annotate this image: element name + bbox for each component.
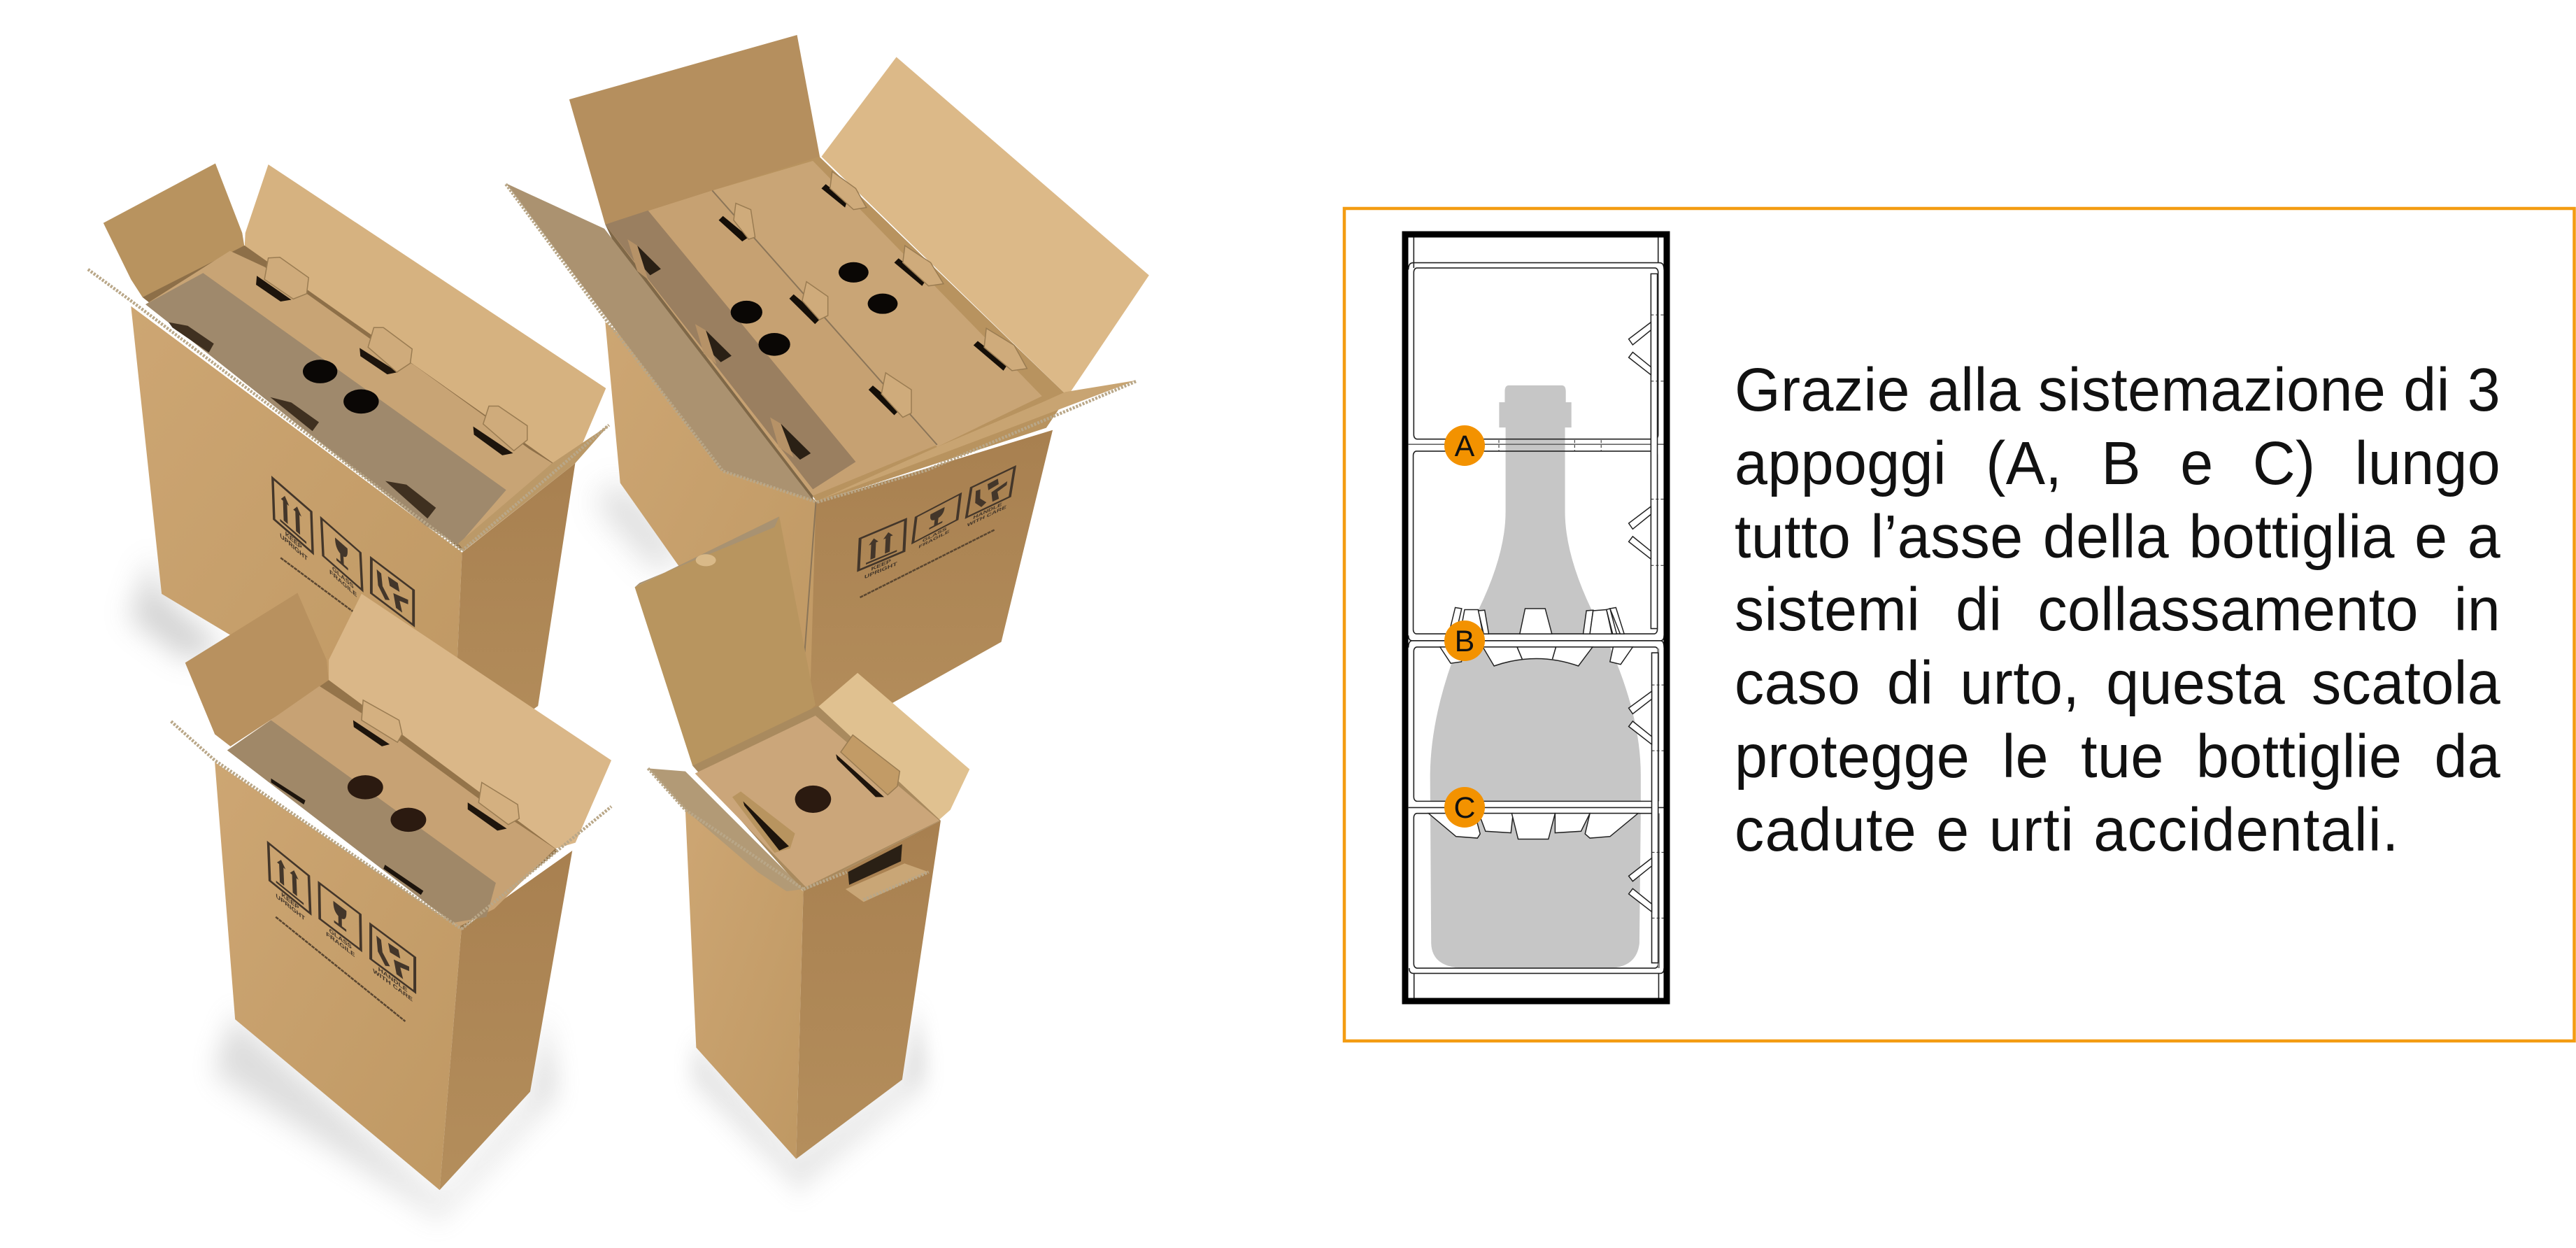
holes [348, 775, 426, 832]
right light flap [821, 57, 1149, 396]
insert right panel [712, 161, 1042, 447]
box 3: front-left double bottle carton [171, 593, 611, 1216]
corner fold [804, 502, 816, 657]
symbol: glass fragile: GLASS [329, 928, 352, 951]
fine print line [276, 917, 405, 1021]
back-left flap [104, 164, 245, 297]
front slots [271, 779, 423, 895]
tabs [353, 700, 519, 830]
bottle holes [731, 262, 897, 356]
symbol: keep upright [273, 478, 313, 568]
panel: orange frame [1344, 208, 2574, 1041]
front tab [846, 863, 929, 902]
text block: description: protegge le tue bottiglie da [1735, 723, 2500, 790]
text block: description: tutto l’asse della bottiglia e a [1735, 503, 2500, 571]
marker A: A [1455, 430, 1475, 463]
insert side [605, 225, 813, 500]
symbol: keep upright: KEEP [871, 558, 891, 572]
symbol: keep upright: KEEP [281, 891, 299, 912]
front face [131, 306, 462, 768]
support tabs below B [1440, 647, 1632, 666]
symbol: handle with care [371, 558, 413, 625]
symbol: glass fragile: GLASS [332, 565, 354, 590]
black outer frame [1405, 234, 1667, 1001]
text block: description: Grazie alla sistemazione di 3 [1735, 356, 2500, 424]
symbol: glass fragile [322, 518, 363, 604]
insert outlines [1409, 237, 1664, 999]
left flap [648, 768, 804, 891]
right face [440, 851, 572, 1190]
marker A [1444, 425, 1485, 466]
symbol: keep upright: KEEP [285, 530, 302, 552]
symbol: glass fragile: FRAGILE [326, 931, 355, 959]
shadow band on insert [605, 211, 855, 490]
back flap [635, 516, 816, 766]
symbol: handle with care: WITH CARE [373, 968, 413, 1003]
shadow: box 3 [212, 1015, 558, 1216]
hole [795, 786, 831, 813]
left face [605, 322, 817, 750]
text block: description [1735, 356, 2500, 864]
back-left flap [185, 593, 329, 746]
marker C: C [1453, 791, 1476, 825]
tabs [627, 171, 1027, 460]
left face [685, 810, 804, 1159]
symbol: glass fragile [319, 883, 361, 964]
symbol: handle with care: WITH CARE [967, 504, 1006, 528]
marker B [1444, 621, 1485, 661]
symbol: glass fragile: GLASS [922, 526, 947, 544]
handling symbols: box 3 [269, 843, 415, 1021]
shadow: box 2 [597, 483, 682, 568]
front face [215, 763, 462, 1190]
symbol: handle with care [965, 467, 1015, 529]
front-right flap [819, 381, 1136, 500]
handling symbols: box 1 [273, 478, 413, 625]
text block: description: caso di urto, questa scatola [1735, 649, 2500, 717]
symbol: keep upright [858, 519, 906, 583]
long back flap [245, 164, 606, 463]
corrugated top edges [88, 269, 609, 551]
panel seam [712, 190, 937, 445]
support tabs above B [1449, 607, 1624, 634]
side collapse tabs [1629, 322, 1652, 912]
right light flap [818, 673, 969, 821]
shadow: box 1 [130, 554, 222, 661]
box 4: single bottle carton [635, 516, 969, 1184]
symbol: keep upright: UPRIGHT [864, 561, 897, 581]
symbol: handle with care: HANDLE [973, 502, 1002, 520]
box interior [143, 246, 556, 551]
symbol: handle with care [371, 924, 415, 1005]
back flap [569, 35, 820, 225]
handling symbols: box 2 [858, 467, 1015, 597]
left flap [506, 183, 813, 500]
box 2: top large carton with two inserts [506, 35, 1149, 750]
text block: description: cadute e urti accidentali. [1735, 796, 2400, 864]
flap top band [635, 516, 779, 587]
shadow band on insert [145, 273, 506, 545]
right face [809, 430, 1053, 750]
symbol: glass fragile: FRAGILE [329, 569, 357, 600]
corrugated edges [171, 721, 611, 929]
insert top [227, 686, 555, 927]
symbol: keep upright: UPRIGHT [280, 532, 308, 563]
symbol: keep upright [269, 843, 311, 928]
marker B: B [1455, 625, 1474, 658]
diagram: bottle inside protective insert [1405, 234, 1667, 1001]
tabs on insert [256, 257, 527, 455]
symbol: glass fragile [911, 494, 960, 553]
box interior [692, 706, 941, 891]
corrugated edges [506, 184, 1136, 502]
fine print line [280, 558, 353, 611]
box interior [605, 157, 1067, 502]
shadow band [227, 721, 496, 923]
front slot [848, 844, 902, 885]
insert left panel [605, 190, 937, 496]
symbol: handle with care: HANDLE [378, 966, 407, 994]
bottle holes [303, 360, 379, 413]
insert top [695, 716, 939, 887]
right side face [453, 463, 575, 768]
corrugated edges [648, 768, 929, 900]
diagram internals [1409, 237, 1664, 999]
fine print line [860, 530, 995, 597]
marker C [1444, 787, 1485, 828]
insert top [145, 251, 553, 545]
box 1: back-left double bottle carton [88, 164, 609, 768]
support tabs below C [1428, 814, 1638, 839]
symbol: keep upright: UPRIGHT [276, 893, 306, 923]
box interior [227, 680, 558, 929]
flap notch [696, 554, 716, 566]
text block: description: sistemi di collassamento in [1735, 576, 2500, 644]
bottle silhouette [1430, 385, 1641, 968]
shelf bands [1409, 634, 1664, 814]
front slots [169, 322, 436, 518]
left tab and slot [732, 791, 795, 853]
right face [796, 821, 941, 1159]
symbol: glass fragile: FRAGILE [918, 529, 950, 549]
long flap [329, 594, 611, 849]
shadow: box 4 [688, 1009, 929, 1184]
right flap [458, 425, 609, 551]
text block: description: appoggi (A, B e C) lungo [1735, 430, 2500, 497]
right tab and slot [836, 735, 899, 797]
